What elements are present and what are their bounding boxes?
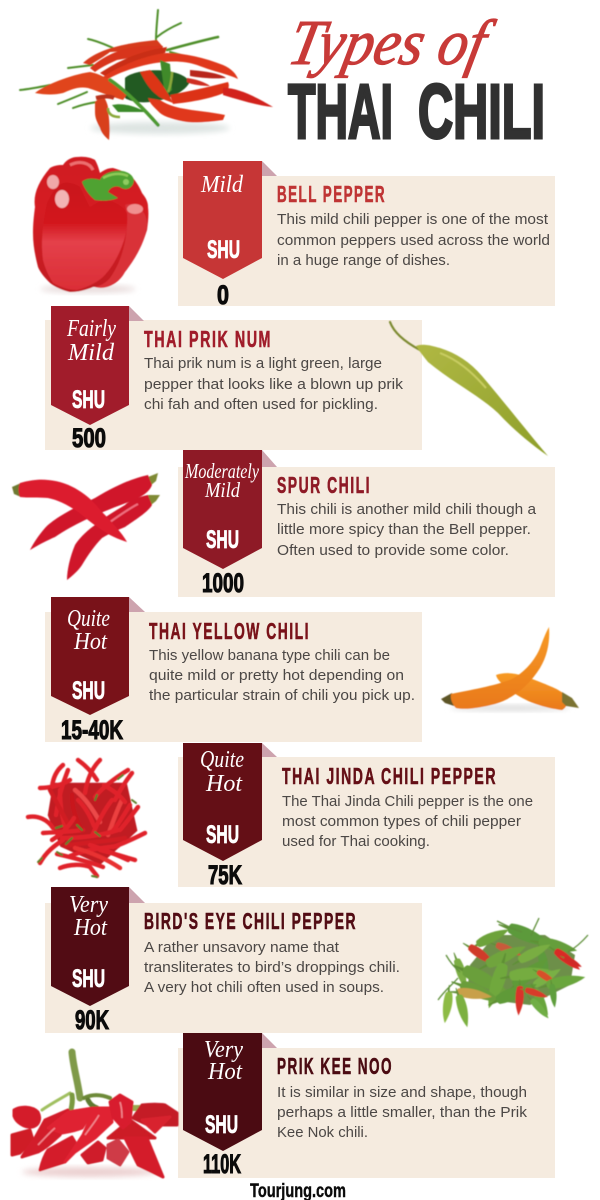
ribbon: [51, 597, 129, 715]
SHU value: 1000: [202, 568, 244, 598]
image: light green prik num pepper: [390, 322, 548, 456]
ribbon fold: [262, 450, 277, 467]
ribbon: [183, 161, 262, 279]
description: [282, 794, 533, 850]
SHU label: SHU: [72, 386, 105, 414]
description: Thai prik num is a light green, large: [144, 356, 382, 372]
panel: prik kee noo: [178, 1033, 555, 1179]
panel background: [45, 903, 422, 1033]
description: Often used to provide some color.: [277, 543, 509, 559]
SHU label: SHU: [72, 965, 105, 993]
description: [144, 940, 400, 996]
image: jinda chili pile: [28, 760, 145, 877]
panel: thai jinda chili pepper: [178, 743, 555, 890]
heat label: Mild: [204, 478, 240, 502]
heat label: Hot: [73, 915, 108, 941]
description: Kee Nok chili.: [277, 1125, 368, 1141]
heading: PRIK KEE NOO: [277, 1053, 393, 1079]
description: quite mild or pretty hot depending on: [149, 668, 404, 684]
panel background: [45, 612, 422, 742]
SHU label: SHU: [206, 821, 239, 849]
title: [283, 7, 545, 155]
heading: BELL PEPPER: [277, 181, 386, 207]
heading: BIRD'S EYE CHILI PEPPER: [144, 908, 357, 934]
heading: SPUR CHILI: [277, 472, 371, 498]
description: used for Thai cooking.: [282, 834, 430, 850]
panel: bell pepper: [178, 161, 555, 310]
description: It is similar in size and shape, though: [277, 1085, 527, 1101]
panel background: [178, 1048, 555, 1178]
SHU value: 15-40K: [61, 715, 123, 745]
ribbon fold: [129, 597, 145, 612]
heat label: [204, 1037, 243, 1085]
SHU label: SHU: [207, 236, 240, 264]
SHU value: 75K: [208, 860, 242, 890]
panel: bird's eye chili pepper: [45, 887, 422, 1035]
image: three red spur chilies: [12, 473, 160, 580]
ribbon: [51, 887, 129, 1006]
heading: THAI YELLOW CHILI: [149, 618, 310, 644]
description: The Thai Jinda Chili pepper is the one: [282, 794, 533, 810]
heat label: Very: [69, 892, 108, 918]
description: This yellow banana type chili can be: [149, 648, 390, 664]
title: script line: Types of: [283, 7, 501, 78]
ribbon: [183, 450, 262, 569]
description: A rather unsavory name that: [144, 940, 339, 956]
description: [277, 1085, 528, 1141]
description: common peppers used across the world: [277, 233, 550, 249]
SHU value: 110K: [203, 1149, 241, 1179]
description: A very hot chili often used in soups.: [144, 980, 384, 996]
ribbon: [183, 743, 262, 861]
description: pepper that looks like a blown up prik: [144, 377, 404, 393]
description: transliterates to bird’s droppings chili.: [144, 960, 400, 976]
heat label: [66, 316, 116, 366]
panel: spur chili: [178, 450, 555, 598]
panel background: [178, 176, 555, 306]
heat label: [67, 606, 110, 655]
panel: thai yellow chili: [45, 597, 422, 745]
ribbon fold: [262, 1033, 277, 1048]
SHU label: SHU: [206, 526, 239, 554]
image: orange chilies: [441, 627, 579, 711]
description: [277, 502, 537, 559]
description: the particular strain of chili you pick up.: [149, 688, 415, 704]
heading: THAI PRIK NUM: [144, 326, 272, 352]
heat label: Fairly: [66, 316, 116, 342]
ribbon fold: [262, 743, 277, 757]
heat label: [69, 892, 108, 941]
description: perhaps a little smaller, than the Prik: [277, 1105, 528, 1121]
description: [149, 648, 415, 704]
SHU label: SHU: [205, 1111, 238, 1139]
panel background: [178, 757, 555, 887]
SHU value: 500: [72, 423, 106, 453]
ribbon: [183, 1033, 262, 1151]
panel background: [178, 467, 555, 597]
ribbon fold: [262, 161, 277, 176]
heat label: Hot: [73, 629, 108, 655]
panel: thai prik num: [45, 306, 422, 453]
heat label: Mild: [200, 172, 244, 198]
image: prik kee noo bunch: [12, 1052, 177, 1177]
description: little more spicy than the Bell pepper.: [277, 522, 531, 538]
SHU value: 90K: [75, 1005, 109, 1035]
description: This mild chili pepper is one of the most: [277, 212, 548, 228]
SHU label: SHU: [72, 677, 105, 705]
title: bold line: [288, 69, 545, 155]
heat label: Hot: [205, 771, 243, 797]
heat label: [184, 459, 260, 502]
image: bird's eye chili pile: [438, 918, 588, 1028]
heat label: Quite: [67, 606, 110, 632]
heat label: Very: [204, 1037, 243, 1063]
description: [277, 212, 550, 269]
heat label: Quite: [200, 747, 244, 773]
description: most common types of chili pepper: [282, 814, 521, 830]
image: red chili pile: [20, 10, 273, 140]
heat label: Moderately: [184, 459, 260, 483]
title: bold line: THAI: [288, 69, 393, 155]
heat label: [200, 747, 244, 797]
heat label: Mild: [67, 340, 115, 366]
description: in a huge range of dishes.: [277, 253, 450, 269]
description: [144, 356, 404, 413]
heat label: Hot: [207, 1059, 243, 1085]
ribbon fold: [129, 887, 145, 903]
panel background: [45, 320, 422, 450]
description: chi fah and often used for pickling.: [144, 397, 378, 413]
image: red bell pepper: [33, 157, 148, 293]
ribbon: [51, 306, 129, 425]
description: This chili is another mild chili though a: [277, 502, 537, 518]
ribbon fold: [129, 306, 144, 321]
SHU value: 0: [217, 280, 229, 310]
